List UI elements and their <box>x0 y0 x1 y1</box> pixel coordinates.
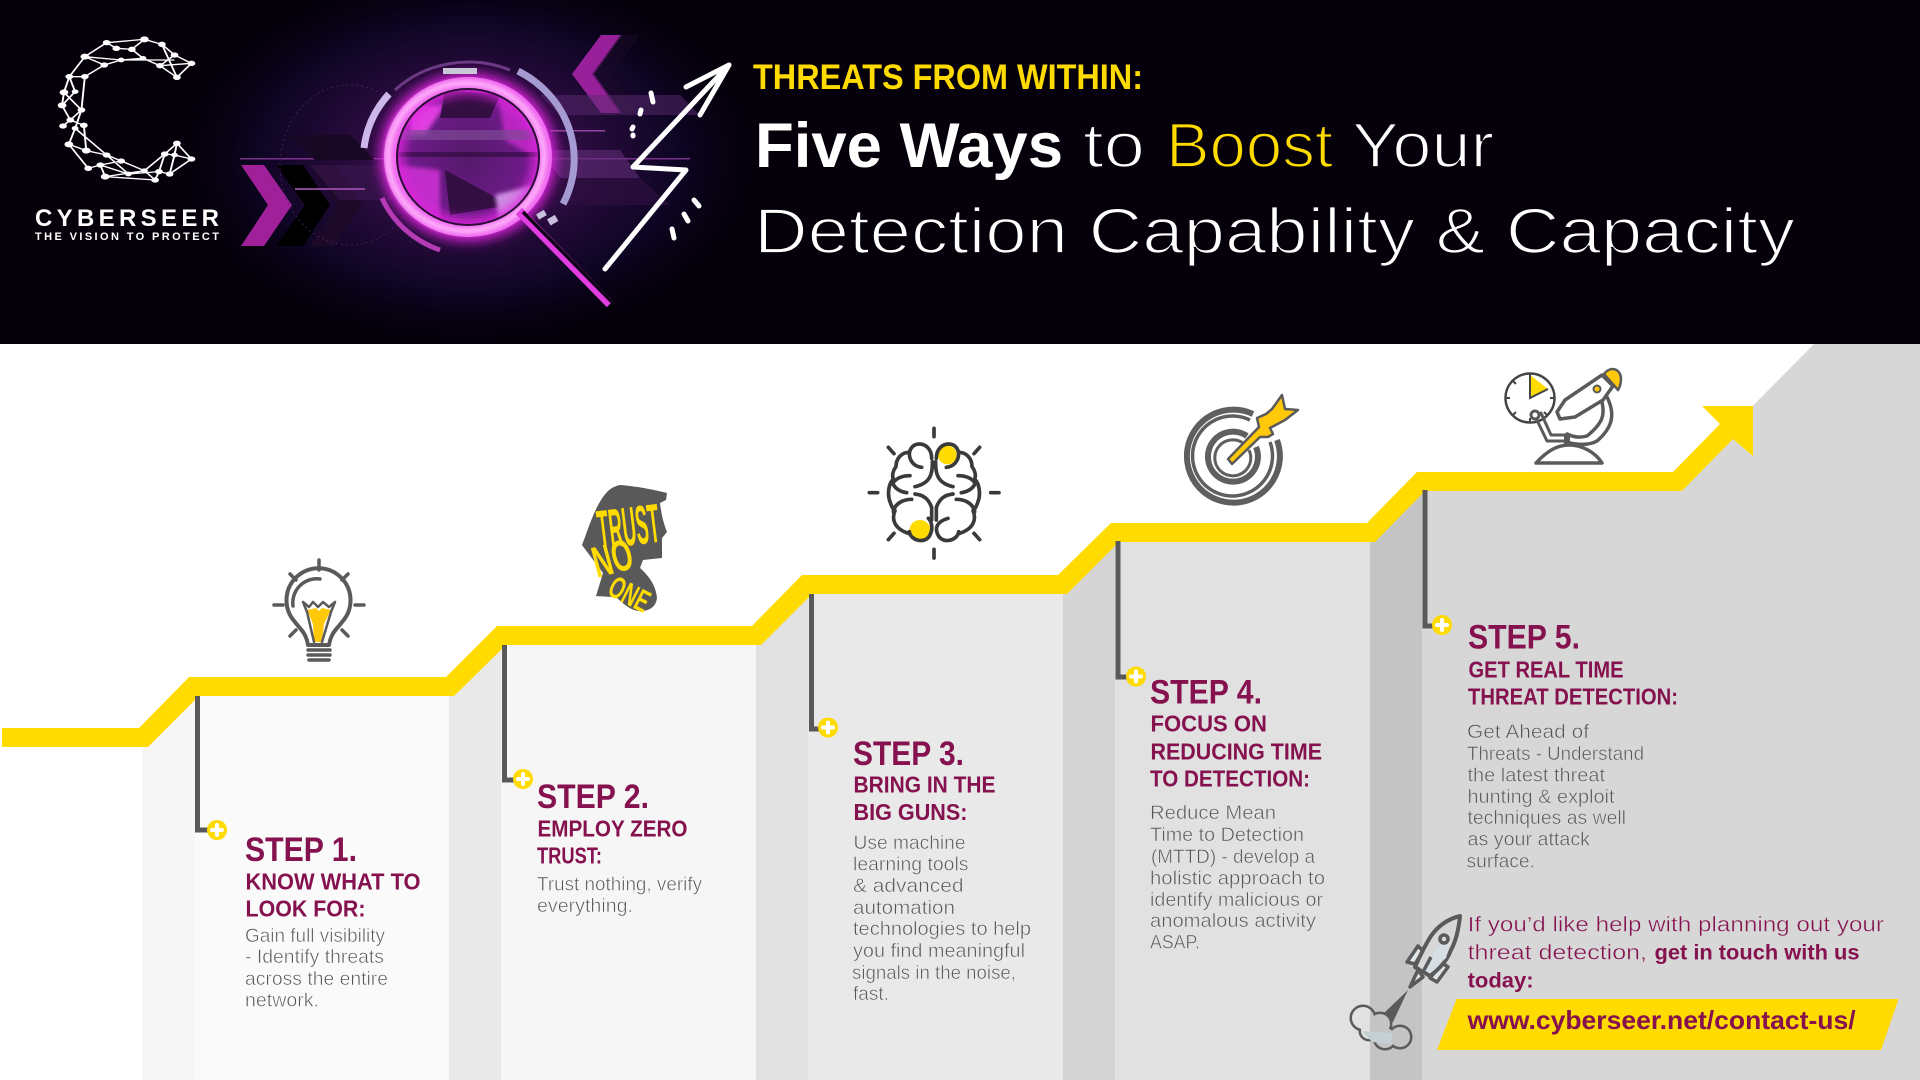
step 4 subheading: FOCUS ON <box>1150 710 1267 736</box>
step 5 subheading: THREAT DETECTION: <box>1468 683 1678 709</box>
step 4 body: holistic approach to <box>1150 868 1325 889</box>
step 5 heading: STEP 5. <box>1468 619 1580 657</box>
icon: brain <box>869 428 999 558</box>
outer HUD arcs <box>364 62 574 250</box>
step 4 body: (MTTD) - develop a <box>1151 847 1315 868</box>
step 2 body: everything. <box>537 896 633 917</box>
step 3 body: technologies to help <box>853 919 1031 940</box>
microscope <box>1531 369 1621 463</box>
step 5 subheading: GET REAL TIME <box>1468 656 1624 682</box>
step 3 body: automation <box>853 898 955 919</box>
staircase arrow <box>2 406 1753 747</box>
step 1 subheading: KNOW WHAT TO <box>246 868 420 894</box>
connector: step 2 <box>504 645 533 789</box>
step 5 body: the latest threat <box>1468 765 1606 786</box>
CTA text: today: <box>1468 968 1534 992</box>
icon: trust no one head: NO <box>587 530 638 588</box>
icon: zig-zag growth arrow <box>605 65 729 269</box>
brain: yellow spots <box>909 446 957 541</box>
step 3 body: Use machine <box>854 833 966 854</box>
step 5 body: Threats - Understand <box>1467 744 1644 765</box>
step 5 text <box>1466 619 1678 872</box>
step 5 body: surface. <box>1466 851 1535 872</box>
step 3 body: learning tools <box>853 855 968 876</box>
step 3 body <box>852 833 1031 1005</box>
call to action <box>1437 913 1899 1050</box>
title: line 1 <box>755 111 1494 181</box>
CTA text: get in touch with us <box>1654 940 1860 964</box>
step 5 body: Get Ahead of <box>1467 722 1590 743</box>
step 4 subheading: TO DETECTION: <box>1150 765 1310 791</box>
step 5 body: hunting & exploit <box>1468 787 1615 808</box>
step 4 text <box>1150 674 1325 954</box>
step 5 subheading <box>1468 656 1678 709</box>
brain: left hemisphere <box>889 444 932 541</box>
CTA text: If you’d like help with planning out your <box>1468 913 1884 937</box>
header band <box>0 0 1920 344</box>
step 4 heading: STEP 4. <box>1150 674 1262 712</box>
step 3 subheading <box>854 772 996 825</box>
step 3 subheading: BRING IN THE <box>854 772 996 798</box>
step 1 text <box>245 831 420 1012</box>
icon: trust no one head <box>582 485 667 619</box>
title: line 1: Your <box>1352 111 1494 181</box>
step 5 body: techniques as well <box>1468 808 1626 829</box>
step 1 heading: STEP 1. <box>245 831 357 869</box>
step 4 body: Reduce Mean <box>1150 803 1276 824</box>
step 2 text <box>537 778 702 917</box>
CTA text: threat detection, <box>1468 940 1647 964</box>
step 1 body: network. <box>245 990 319 1012</box>
icon: network letter C <box>58 36 195 183</box>
logo wordmark: CYBERSEER <box>35 205 219 232</box>
title: line 1: to <box>1083 111 1145 181</box>
step 2 heading: STEP 2. <box>537 778 649 816</box>
step 2 subheading: EMPLOY ZERO <box>538 816 688 842</box>
step 2 subheading <box>537 816 688 869</box>
step 2 body: Trust nothing, verify <box>537 874 702 895</box>
rocket body <box>1415 916 1460 976</box>
step 3 body: you find meaningful <box>853 941 1025 962</box>
title: line 2: Detection Capability & Capacity <box>754 195 1795 267</box>
lens body <box>394 86 542 228</box>
connector: step 5 <box>1425 490 1452 635</box>
step 4 body: identify malicious or <box>1150 890 1324 911</box>
icon: target and dart <box>1187 395 1298 503</box>
exhaust cloud <box>1352 1007 1410 1048</box>
icon: rocket launch <box>1352 916 1460 1048</box>
tech bands <box>240 85 700 245</box>
title: kicker: THREATS FROM WITHIN: <box>753 58 1143 97</box>
step 3 body: signals in the noise, <box>852 963 1016 984</box>
title: line 1: Boost <box>1166 111 1334 181</box>
step 2 body <box>537 874 702 917</box>
connector: step 3 <box>812 594 838 738</box>
logo tagline: THE VISION TO PROTECT <box>35 231 219 243</box>
title: line 1: Five Ways <box>755 111 1063 181</box>
step 4 body <box>1150 803 1325 954</box>
step 3 body: fast. <box>853 984 889 1005</box>
exhaust flame <box>1382 990 1408 1022</box>
illustration: magnifying glass with chevrons <box>240 35 700 304</box>
step 2 subheading: TRUST: <box>537 843 602 869</box>
magnifier handle <box>519 211 612 304</box>
step 3 body: & advanced <box>853 876 964 897</box>
step 3 subheading: BIG GUNS: <box>854 799 968 825</box>
step 5 body: as your attack <box>1468 830 1591 850</box>
logo: Cyberseer <box>35 36 219 243</box>
title block <box>753 58 1795 267</box>
step 1 body: Gain full visibility <box>245 926 385 947</box>
step 1 body: - Identify threats <box>245 947 384 968</box>
step 1 subheading: LOOK FOR: <box>246 896 366 922</box>
step 5 body <box>1466 722 1644 872</box>
brain: rays <box>869 428 999 558</box>
staircase columns <box>142 344 1920 1080</box>
step 1 body <box>245 926 388 1012</box>
step 4 subheading <box>1150 710 1322 791</box>
brain: right hemisphere <box>936 444 979 541</box>
CTA link text: www.cyberseer.net/contact-us/ <box>1467 1005 1856 1035</box>
icon: light bulb <box>274 560 364 660</box>
icon: trust no one head: ONE <box>603 569 656 619</box>
step 4 body: ASAP. <box>1150 933 1200 954</box>
step 4 body: anomalous activity <box>1150 911 1317 932</box>
step 1 body: across the entire <box>245 969 388 990</box>
CTA text <box>1468 913 1884 992</box>
connector: step 1 <box>198 696 227 840</box>
chevron shapes <box>241 35 640 246</box>
connector: step 4 <box>1118 541 1146 686</box>
text: TRUST <box>594 492 663 561</box>
step 3 heading: STEP 3. <box>853 735 964 773</box>
clock <box>1506 374 1554 422</box>
step 4 body: Time to Detection <box>1150 825 1304 846</box>
neon ring <box>390 83 546 231</box>
step 1 subheading <box>246 868 420 922</box>
step 3 text <box>852 735 1031 1005</box>
rocket fins <box>1407 946 1448 987</box>
neon ring glow <box>390 83 546 231</box>
icon: clock and microscope <box>1506 369 1621 463</box>
CTA link banner <box>1437 999 1899 1050</box>
step 4 subheading: REDUCING TIME <box>1150 739 1322 765</box>
